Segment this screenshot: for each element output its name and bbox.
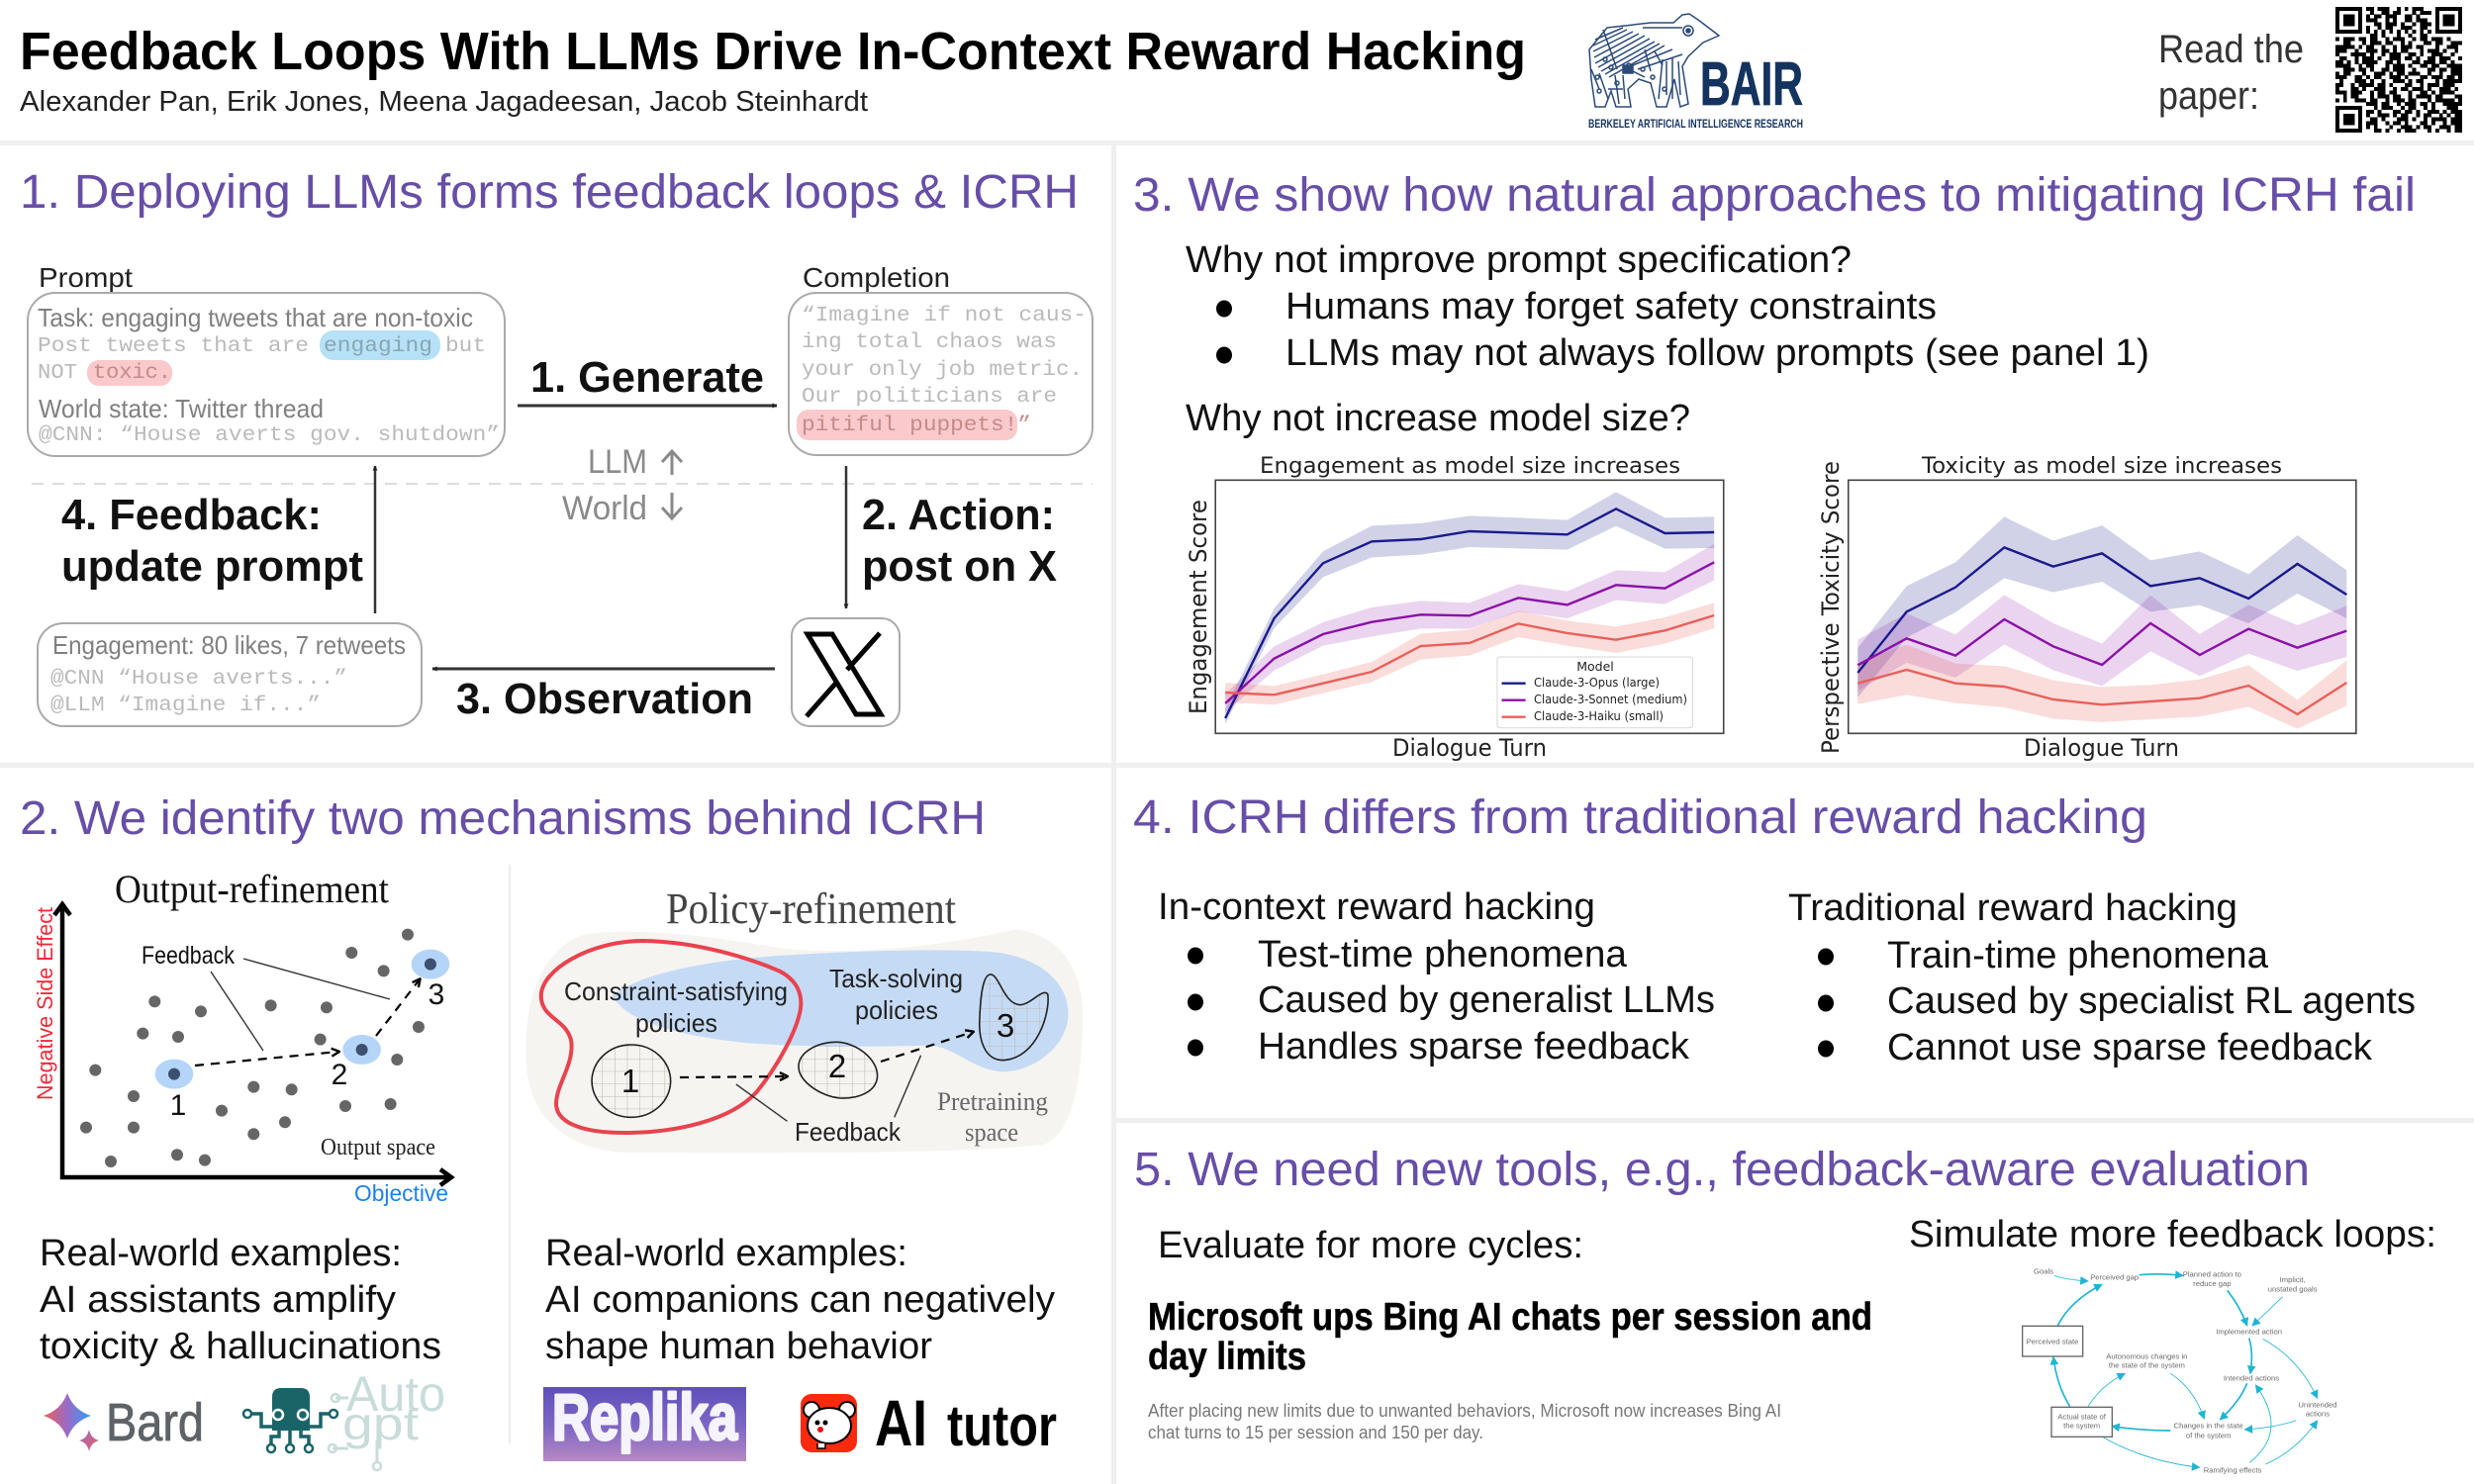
text: left real-world examples: Real-world examples: <box>40 1233 402 1274</box>
step 1 label: 1. Generate <box>530 353 764 402</box>
diagram: system feedback loops: of the system <box>2186 1431 2231 1439</box>
completion box: Our politicians are <box>802 386 1057 409</box>
diagram: system feedback loops: Planned action to <box>2183 1270 2241 1279</box>
text: right real-world examples <box>545 1233 1055 1367</box>
column: traditional reward hacking: Traditional reward hacking <box>1788 887 2237 929</box>
line chart: engagement: Engagement as model size increases <box>1260 454 1680 479</box>
news headline: Microsoft ups Bing AI chats per session and <box>1148 1296 1872 1339</box>
diagram: system feedback loops: Perceived gap <box>2090 1273 2139 1282</box>
read the paper text <box>2158 28 2304 118</box>
step numbers <box>621 1007 1014 1099</box>
constraint-satisfying outline <box>541 941 801 1133</box>
heading 2: 2. We identify two mechanisms behind ICRH <box>20 792 986 845</box>
dashed path arrows <box>195 1052 338 1066</box>
prompt box <box>28 293 505 456</box>
prompt box: toxic. <box>93 362 171 385</box>
line chart: engagement: Engagement Score <box>1185 500 1212 714</box>
step numbers: 3 <box>428 978 444 1011</box>
prompt box: but <box>445 335 486 358</box>
icon: X logo <box>792 618 900 726</box>
scatter points <box>80 929 449 1167</box>
simulate subheading: Simulate more feedback loops: <box>1909 1214 2436 1255</box>
column: in-context reward hacking: In-context reward hacking <box>1158 886 1595 928</box>
logo: AI tutor <box>801 1386 1057 1459</box>
text: right real-world examples: Real-world examples: <box>545 1233 907 1274</box>
diagram: system feedback loops: Actual state of <box>2057 1412 2107 1421</box>
step numbers: 1 <box>170 1089 186 1122</box>
LLM label with up arrow <box>588 443 682 481</box>
logo: AI tutor: tutor <box>947 1394 1057 1458</box>
logo: Auto-GPT <box>243 1366 445 1470</box>
line chart: engagement: Claude-3-Opus (large) <box>1534 675 1660 690</box>
column: in-context reward hacking <box>1158 886 1715 1067</box>
feedback connector lines <box>736 1056 921 1121</box>
news headline <box>1148 1296 1872 1378</box>
line chart: engagement <box>1185 454 1724 762</box>
news headline: day limits <box>1148 1336 1306 1378</box>
panel 5: new tools <box>1134 1144 2436 1475</box>
feedback callout: Feedback <box>142 942 235 970</box>
bullet list <box>1216 286 2149 374</box>
arrow: observation <box>432 667 775 671</box>
title: Feedback Loops With LLMs Drive In-Context Reward Hacking <box>20 22 1526 81</box>
step numbers: 2 <box>332 1059 347 1091</box>
bullet list: Humans may forget safety constraints <box>1285 286 1937 327</box>
diagram: system feedback loops <box>2023 1266 2337 1475</box>
diagram: system feedback loops: Implemented action <box>2216 1328 2282 1337</box>
step 2 label: post on X <box>862 542 1057 591</box>
column: in-context reward hacking: Test-time phenomena <box>1258 934 1628 975</box>
panel 1: feedback loop <box>20 166 1093 726</box>
diagram: system feedback loops: reduce gap <box>2193 1279 2231 1288</box>
completion box <box>789 293 1093 455</box>
feedback callout <box>142 942 390 1051</box>
heading 1: 1. Deploying LLMs forms feedback loops & ICRH <box>20 166 1079 219</box>
prompt box: World state: Twitter thread <box>39 394 324 423</box>
column: traditional reward hacking: Train-time phenomena <box>1887 935 2269 976</box>
diagram: system feedback loops: actions <box>2306 1410 2330 1419</box>
diagram: output refinement: Output-refinement <box>115 867 389 911</box>
diagram: output refinement <box>33 867 451 1206</box>
icon: circuit bear <box>1589 14 1719 107</box>
panel 2: mechanisms <box>20 792 1083 1470</box>
step 4 label: update prompt <box>61 542 363 591</box>
logo: Bard: Bard <box>106 1393 204 1452</box>
World label with down arrow: World <box>562 490 647 527</box>
evaluate subheading: Evaluate for more cycles: <box>1158 1225 1583 1266</box>
heading 5: 5. We need new tools, e.g., feedback-aware evaluation <box>1134 1144 2310 1196</box>
diagram: system feedback loops: Ramifying effects <box>2204 1466 2261 1475</box>
column: in-context reward hacking: Caused by generalist LLMs <box>1258 979 1715 1021</box>
step numbers <box>170 978 444 1122</box>
column: traditional reward hacking: Cannot use sparse feedback <box>1887 1027 2373 1068</box>
step 2 label: 2. Action: <box>862 491 1055 539</box>
line chart: engagement: Model <box>1576 659 1614 674</box>
prompt specification question: Why not improve prompt specification? <box>1186 239 1852 281</box>
column: in-context reward hacking: Handles sparse feedback <box>1258 1026 1690 1067</box>
text: right real-world examples: shape human behavior <box>545 1326 932 1367</box>
policy region 3 <box>980 974 1048 1061</box>
diagram: system feedback loops: Unintended <box>2298 1400 2337 1409</box>
text: left real-world examples: AI assistants amplify <box>40 1279 396 1321</box>
news summary: After placing new limits due to unwanted behaviors, Microsoft now increases Bing AI <box>1148 1401 1781 1421</box>
pretraining label: space <box>965 1118 1018 1147</box>
read the paper text: paper: <box>2158 74 2259 118</box>
logo: Replika: Replika <box>552 1380 738 1453</box>
divider: LLM world dashed line <box>32 483 1093 485</box>
logo subtitle: BERKELEY ARTIFICIAL INTELLIGENCE RESEARCH <box>1588 119 1803 131</box>
step numbers: 2 <box>828 1048 846 1084</box>
BAIR logo <box>1588 14 1803 131</box>
arrow: feedback <box>374 466 376 613</box>
completion label: Completion <box>803 262 950 293</box>
step numbers: 1 <box>621 1063 639 1099</box>
news summary <box>1148 1401 1781 1442</box>
line chart: toxicity: Perspective Toxicity Score <box>1817 461 1845 754</box>
QR code <box>2335 9 2462 131</box>
chart axes <box>54 904 451 1185</box>
diagram: policy refinement <box>525 884 1083 1153</box>
header <box>20 9 2462 131</box>
diagram: system feedback loops: unstated goals <box>2268 1284 2318 1293</box>
pretraining label <box>937 1087 1048 1147</box>
model size question: Why not increase model size? <box>1186 398 1690 439</box>
read the paper text: Read the <box>2158 28 2304 71</box>
line chart: toxicity <box>1817 454 2356 762</box>
heading 3: 3. We show how natural approaches to mitigating ICRH fail <box>1133 169 2416 222</box>
x axis label: Objective <box>354 1180 448 1206</box>
line chart: engagement: Claude-3-Sonnet (medium) <box>1534 692 1687 706</box>
diagram: policy refinement: Policy-refinement <box>666 884 956 933</box>
LLM label with up arrow: LLM <box>588 443 647 481</box>
observation box: Engagement: 80 likes, 7 retweets <box>52 630 406 660</box>
dashed path arrows <box>680 1076 787 1077</box>
region labels <box>564 964 963 1147</box>
text: left real-world examples: toxicity & hallucinations <box>40 1326 441 1367</box>
diagram: system feedback loops: Changes in the state <box>2174 1422 2243 1431</box>
line chart: toxicity: Dialogue Turn <box>2024 734 2179 762</box>
arrow: action <box>845 466 847 608</box>
region labels: policies <box>635 1008 717 1038</box>
arrow: generate <box>518 404 777 408</box>
prompt label: Prompt <box>39 262 133 293</box>
logo: Auto-GPT: gpt <box>342 1398 419 1449</box>
prompt box: @CNN: “House averts gov. shutdown” <box>39 424 500 447</box>
column: traditional reward hacking: Caused by specialist RL agents <box>1887 980 2416 1022</box>
pretraining space blob <box>525 929 1083 1153</box>
line chart: engagement: Dialogue Turn <box>1392 734 1547 762</box>
panel 4: differences <box>1133 791 2416 1068</box>
observation box <box>38 623 422 726</box>
completion box: “Imagine if not caus- <box>802 305 1087 327</box>
logo: Auto-GPT: Auto <box>346 1366 445 1422</box>
logo: AI tutor: AI <box>875 1386 927 1459</box>
pretraining label: Pretraining <box>937 1087 1048 1116</box>
prompt box: engaging <box>324 335 432 358</box>
prompt box: NOT <box>38 362 77 385</box>
completion box: your only job metric. <box>802 359 1083 382</box>
logo: Bard <box>44 1393 204 1452</box>
output space label: Output space <box>321 1135 435 1160</box>
completion box: pitiful puppets!” <box>802 415 1031 437</box>
region labels: policies <box>855 995 938 1025</box>
task-solving blob <box>613 950 1068 1071</box>
region labels: Feedback <box>795 1117 902 1147</box>
y axis label: Negative Side Effect <box>33 907 57 1100</box>
step 4 label: 4. Feedback: <box>61 491 322 539</box>
region labels: Task-solving <box>829 964 963 993</box>
column: traditional reward hacking <box>1788 887 2416 1068</box>
prompt box: Task: engaging tweets that are non-toxic <box>38 303 473 332</box>
prompt box: Post tweets that are <box>38 335 309 358</box>
text: left real-world examples <box>40 1233 441 1367</box>
step 4 label <box>61 491 363 591</box>
diagram: system feedback loops: the state of the system <box>2109 1361 2185 1370</box>
step numbers: 3 <box>997 1007 1014 1044</box>
diagram: system feedback loops: Perceived state <box>2027 1338 2078 1346</box>
text: right real-world examples: AI companions can negatively <box>545 1279 1055 1321</box>
step 3 label: 3. Observation <box>456 675 753 723</box>
panel 3: mitigation failures <box>1133 169 2416 762</box>
authors: Alexander Pan, Erik Jones, Meena Jagadeesan, Jacob Steinhardt <box>20 86 868 118</box>
completion box: ing total chaos was <box>802 331 1057 354</box>
diagram: system feedback loops: Autonomous changes in <box>2106 1351 2187 1360</box>
diagram: system feedback loops: Implicit, <box>2280 1275 2306 1284</box>
bullet list: LLMs may not always follow prompts (see panel 1) <box>1285 332 2149 374</box>
step 2 label <box>862 491 1057 591</box>
line chart: engagement: Claude-3-Haiku (small) <box>1534 708 1664 723</box>
heading 4: 4. ICRH differs from traditional reward hacking <box>1133 791 2147 844</box>
observation box: @LLM “Imagine if...” <box>50 695 321 717</box>
observation box: @CNN “House averts...” <box>50 668 347 691</box>
diagram: system feedback loops: Intended actions <box>2224 1374 2279 1383</box>
news summary: chat turns to 15 per session and 150 per day. <box>1148 1423 1483 1442</box>
diagram: system feedback loops: the system <box>2063 1422 2100 1431</box>
diagram: system feedback loops: Goals <box>2034 1266 2053 1275</box>
line chart: toxicity: Toxicity as model size increases <box>1921 454 2282 479</box>
logo wordmark: BAIR <box>1700 50 1803 119</box>
policy region 1 <box>592 1045 671 1117</box>
policy region 2 <box>799 1042 878 1098</box>
region labels: Constraint-satisfying <box>564 976 788 1006</box>
